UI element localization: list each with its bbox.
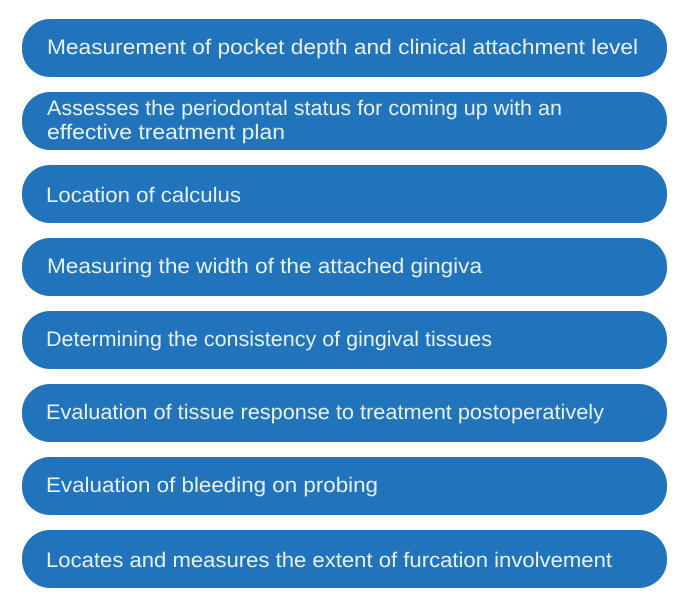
pill: furcation involvement	[22, 530, 667, 588]
pill: periodontal status assessment	[22, 92, 667, 150]
pill: measurement of pocket depth	[22, 19, 667, 77]
pill: periodontal status assessment: effective treatment plan	[47, 121, 285, 144]
pill: tissue response evaluation	[22, 384, 667, 442]
pill: consistency of gingival tissues: Determining the consistency of gingival tissues	[46, 328, 492, 351]
pill: furcation involvement: Locates and measures the extent of furcation involvement	[46, 549, 612, 572]
pill: location of calculus: Location of calculus	[46, 184, 241, 207]
pill: periodontal status assessment: Assesses the periodontal status for coming up with an	[47, 97, 562, 120]
pill: width of attached gingiva	[22, 238, 667, 296]
pill: bleeding on probing: Evaluation of bleeding on probing	[46, 474, 378, 497]
pill: bleeding on probing	[22, 457, 667, 515]
pill: location of calculus	[22, 165, 667, 223]
pill: width of attached gingiva: Measuring the width of the attached gingiva	[47, 255, 482, 278]
pill: tissue response evaluation: Evaluation of tissue response to treatment postoperatively	[46, 401, 605, 424]
pill: measurement of pocket depth: Measurement of pocket depth and clinical attachment level	[47, 36, 638, 59]
pill: consistency of gingival tissues	[22, 311, 667, 369]
